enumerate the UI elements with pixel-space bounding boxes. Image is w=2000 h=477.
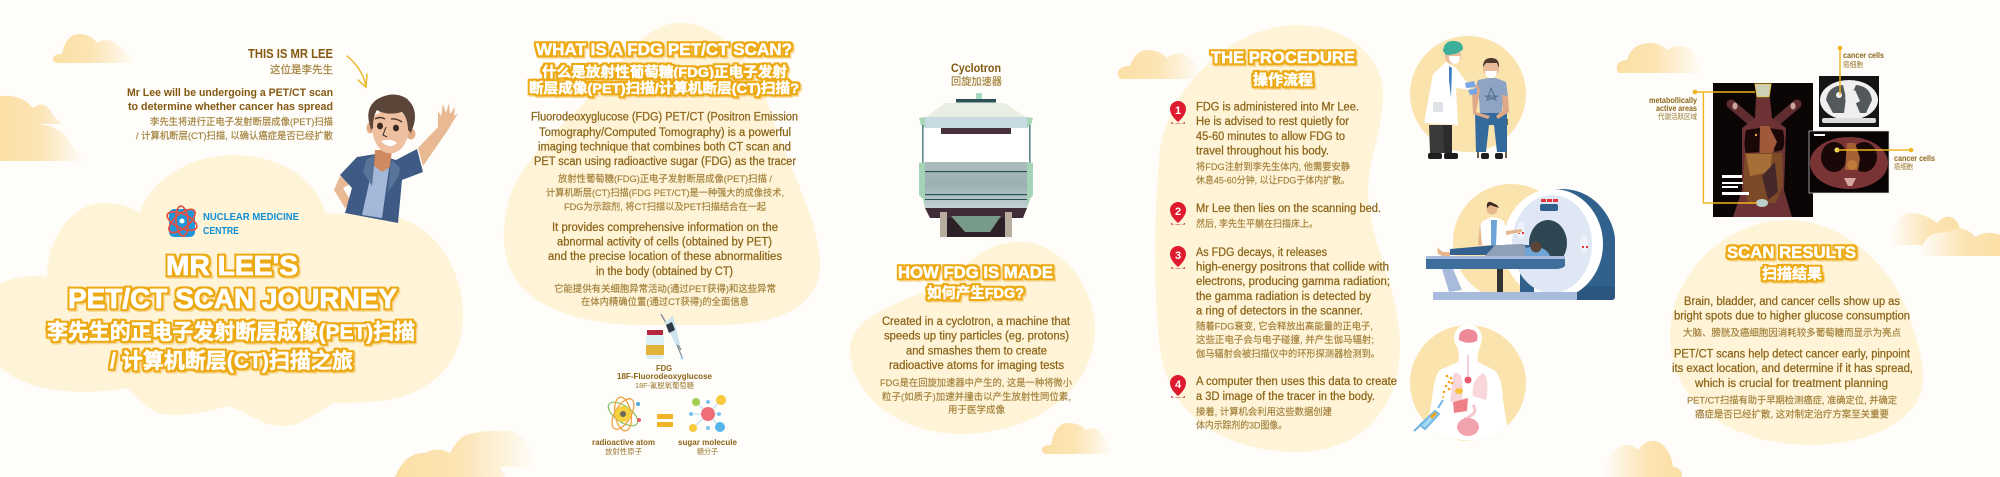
heading: how FDG is made <box>898 263 1053 302</box>
text block: how FDG is made: radioactive atoms for imaging tests <box>889 360 1064 372</box>
image: whole body PET <box>1713 83 1813 217</box>
cloud: results top left <box>1617 43 1703 73</box>
step 2 text <box>1196 203 1381 230</box>
cloud: results bottom left <box>1603 441 1682 477</box>
text block: FDG PET/CT description: Tomography/Computed Tomography) is a powerful <box>539 127 791 139</box>
step 1 text: He is advised to rest quietly for <box>1196 116 1349 128</box>
text block: FDG PET/CT description: 计算机断层(CT)扫描(FDG PET/CT)是一种强大的成像技术, <box>546 187 784 199</box>
heading: the procedure: 操作流程 <box>1253 71 1314 89</box>
text: cyclotron label: Cyclotron <box>951 63 1001 75</box>
icon: step pin 4 <box>1170 375 1186 398</box>
title: MR LEE'S <box>166 250 298 281</box>
text block: this is Mr Lee: / 计算机断层(CT)扫描, 以确认癌症是否已经扩散 <box>136 130 333 142</box>
step 3 text: the gamma radiation is detected by <box>1196 291 1371 303</box>
illustration: FDG distribution in the body <box>1410 324 1526 445</box>
step 1 text: 休息45-60分钟, 以让FDG于体内扩散。 <box>1196 174 1350 186</box>
icon: step pin 2 <box>1170 202 1186 225</box>
blob: how FDG is made panel <box>850 242 1095 434</box>
text block: FDG PET/CT description: 在体内精确位置(通过CT获得)的全面信息 <box>581 296 749 308</box>
text block: this is Mr Lee <box>127 47 333 142</box>
text block: scan results: 大脑、膀胱及癌细胞因消耗较多葡萄糖而显示为亮点 <box>1683 327 1901 339</box>
title: / 计算机断层(CT)扫描之旅 <box>110 349 353 373</box>
label: cancer cells right <box>1894 154 1935 171</box>
step 4 text <box>1196 376 1397 432</box>
text block: how FDG is made: speeds up tiny particles (eg. protons) <box>884 330 1069 342</box>
icon: atom logo <box>165 205 199 237</box>
text block: scan results: PET/CT scans help detect cancer early, pinpoint <box>1674 348 1911 360</box>
heading: what is a FDG PET/CT scan: WHAT IS A FDG PET/CT SCAN? <box>536 40 792 59</box>
icon: step pin 1 <box>1170 101 1186 124</box>
text: FDG label: FDG <box>656 364 672 373</box>
image: axial PET/CT <box>1809 131 1889 193</box>
text block: FDG PET/CT description: imaging technique that combines both CT scan and <box>538 142 791 154</box>
text block: this is Mr Lee: 这位是李先生 <box>270 63 333 76</box>
text block: FDG PET/CT description: It provides comprehensive information on the <box>552 222 778 234</box>
icon: step pin 1: 1 <box>1175 105 1181 117</box>
illustration: doctor injecting patient <box>1410 36 1526 159</box>
text block: scan results: its exact location, and determine if it has spread, <box>1672 363 1913 375</box>
text block: FDG PET/CT description <box>531 112 798 308</box>
heading: scan results: 扫描结果 <box>1762 265 1823 283</box>
step 2 text: Mr Lee then lies on the scanning bed. <box>1196 203 1381 215</box>
title <box>47 250 415 373</box>
label: metabolically active areas <box>1649 96 1697 121</box>
heading: what is a FDG PET/CT scan: 断层成像(PET)扫描/计算机断层(CT)扫描? <box>529 80 799 96</box>
title: 李先生的正电子发射断层成像(PET)扫描 <box>47 320 415 344</box>
step 1 text: travel throughout his body. <box>1196 146 1329 158</box>
text: cyclotron label <box>951 63 1002 88</box>
text block: how FDG is made: and smashes them to create <box>906 346 1047 358</box>
illustration: Mr Lee waving <box>334 94 458 223</box>
step 1 text <box>1196 102 1359 186</box>
logo: nuclear medicine centre: NUCLEAR MEDICINE <box>203 211 299 223</box>
cloud: procedure top left <box>1118 50 1203 79</box>
text: atom and molecule labels <box>592 438 738 456</box>
label: cancer cells right: 癌细胞 <box>1894 161 1913 171</box>
icon: equals sign <box>657 414 673 427</box>
label: metabolically active areas: metabollically <box>1649 96 1697 105</box>
text block: scan results <box>1672 296 1913 420</box>
blob: what is FDG panel <box>504 23 820 325</box>
step 1 text: 将FDG注射到李先生体内, 他需要安静 <box>1196 161 1350 173</box>
heading: the procedure <box>1211 48 1355 89</box>
text block: this is Mr Lee: THIS IS MR LEE <box>248 47 333 61</box>
step 3 text: electrons, producing gamma radiation; <box>1196 276 1390 288</box>
heading: what is a FDG PET/CT scan <box>529 40 799 96</box>
arrow: pointing to Mr Lee <box>347 56 367 87</box>
heading: the procedure: THE PROCEDURE <box>1211 48 1355 67</box>
icon: step pin 3 <box>1170 246 1186 269</box>
cloud: results right pair <box>1890 213 2000 256</box>
blob: scan results panel <box>1670 220 1923 445</box>
text block: FDG PET/CT description: and the precise location of these abnormalities <box>548 251 782 263</box>
label: cancer cells top <box>1843 51 1884 69</box>
text block: how FDG is made: 用于医学成像 <box>948 404 1005 416</box>
text: atom and molecule labels: 糖分子 <box>697 446 718 456</box>
step 4 text: a 3D image of the tracer in the body. <box>1196 391 1375 403</box>
text block: FDG PET/CT description: 它能提供有关细胞异常活动(通过PET获得)和这些异常 <box>554 283 776 295</box>
logo: nuclear medicine centre: CENTRE <box>203 225 239 237</box>
step 3 text: 伽马辐射会被扫描仪中的环形探测器检测到。 <box>1196 348 1380 360</box>
text: FDG label: 18F-Fluorodeoxyglucose <box>617 372 713 381</box>
label: cancer cells top: 癌细胞 <box>1843 59 1863 69</box>
step 4 text: 体内示踪剂的3D图像。 <box>1196 420 1287 432</box>
cloud: bottom centre left <box>395 431 537 477</box>
step 3 text: high-energy positrons that collide with <box>1196 262 1389 274</box>
step 4 text: A computer then uses this data to create <box>1196 376 1397 388</box>
text block: scan results: Brain, bladder, and cancer cells show up as <box>1684 296 1900 308</box>
step 3 text: a ring of detectors in the scanner. <box>1196 306 1363 318</box>
text: atom and molecule labels: radioactive atom <box>592 438 655 447</box>
text block: FDG PET/CT description: FDG为示踪剂, 将CT扫描以及PET扫描结合在一起 <box>564 201 766 213</box>
label: metabolically active areas: active areas <box>1656 104 1697 113</box>
step 3 text <box>1196 247 1390 360</box>
icon: step pin 3: 3 <box>1175 250 1181 262</box>
step 4 text: 接着, 计算机会利用这些数据创建 <box>1196 406 1332 418</box>
text block: how FDG is made: FDG是在回旋加速器中产生的, 这是一种将微小 <box>880 377 1072 389</box>
text: FDG label <box>617 364 713 390</box>
cloud: bottom centre <box>1042 423 1113 454</box>
icon: radioactive atom <box>604 395 642 433</box>
step 3 text: 这些正电子会与电子碰撞, 并产生伽马辐射; <box>1196 334 1374 346</box>
illustration: cyclotron machine <box>919 93 1033 237</box>
icon: step pin 2: 2 <box>1175 206 1181 218</box>
text block: this is Mr Lee: 李先生将进行正电子发射断层成像(PET)扫描 <box>150 116 333 128</box>
chart: PET/CT scan images with callouts <box>1693 46 1913 217</box>
text: atom and molecule labels: sugar molecule <box>678 438 738 447</box>
text: atom and molecule labels: 放射性原子 <box>605 446 642 456</box>
cloud: left edge <box>0 96 85 161</box>
step 1 text: FDG is administered into Mr Lee. <box>1196 102 1359 114</box>
text block: FDG PET/CT description: PET scan using radioactive sugar (FDG) as the tracer <box>534 156 796 168</box>
text block: how FDG is made <box>880 316 1072 416</box>
logo: nuclear medicine centre <box>165 205 299 237</box>
step 3 text: 随着FDG衰变, 它会释放出高能量的正电子, <box>1196 320 1373 332</box>
step 3 text: As FDG decays, it releases <box>1196 247 1327 259</box>
text block: scan results: which is crucial for treatment planning <box>1694 378 1888 390</box>
text block: this is Mr Lee: to determine whether cancer has spread <box>128 101 333 113</box>
label: cancer cells top: cancer cells <box>1843 51 1884 60</box>
blob: procedure panel <box>1155 25 1400 452</box>
heading: scan results: SCAN RESULTS <box>1727 243 1856 262</box>
image: axial CT <box>1819 76 1879 127</box>
text block: FDG PET/CT description: Fluorodeoxyglucose (FDG) PET/CT (Positron Emission <box>531 112 798 124</box>
text block: FDG PET/CT description: 放射性葡萄糖(FDG)正电子发射断层成像(PET)扫描 / <box>558 173 772 185</box>
step 1 text: 45-60 minutes to allow FDG to <box>1196 131 1345 143</box>
label: metabolically active areas: 代谢活跃区域 <box>1658 111 1697 121</box>
text block: this is Mr Lee: Mr Lee will be undergoing a PET/CT scan <box>127 87 333 99</box>
label: cancer cells right: cancer cells <box>1894 154 1935 163</box>
text block: how FDG is made: Created in a cyclotron, a machine that <box>882 316 1071 328</box>
cloud: top left small <box>53 34 137 63</box>
text block: how FDG is made: 粒子(如质子)加速并撞击以产生放射性同位素, <box>882 391 1071 403</box>
big title cloud <box>0 155 463 426</box>
icon: FDG vial and syringe <box>646 314 684 360</box>
step 2 text: 然后, 李先生平躺在扫描床上。 <box>1196 218 1318 230</box>
title: PET/CT SCAN JOURNEY <box>68 283 397 314</box>
text block: scan results: bright spots due to higher glucose consumption <box>1674 310 1910 322</box>
text block: scan results: PET/CT扫描有助于早期检测癌症, 准确定位, 并确定 <box>1687 394 1897 406</box>
heading: scan results <box>1727 243 1856 283</box>
text: FDG label: 18F-氟脱氧葡萄糖 <box>635 380 694 390</box>
text block: scan results: 癌症是否已经扩散, 这对制定治疗方案至关重要 <box>1695 408 1889 420</box>
callout lines and dots <box>1693 46 1913 204</box>
heading: what is a FDG PET/CT scan: 什么是放射性葡萄糖(FDG)正电子发射 <box>542 64 787 80</box>
icon: sugar molecule <box>689 395 726 432</box>
illustration: patient in PET/CT scanner <box>1426 184 1615 300</box>
heading: how FDG is made: HOW FDG IS MADE <box>898 263 1053 282</box>
text block: FDG PET/CT description: abnormal activity of cells (obtained by PET) <box>557 236 772 248</box>
text: cyclotron label: 回旋加速器 <box>951 75 1002 88</box>
heading: how FDG is made: 如何产生FDG? <box>927 284 1024 302</box>
icon: step pin 4: 4 <box>1175 379 1182 391</box>
text block: FDG PET/CT description: in the body (obtained by CT) <box>596 266 733 278</box>
